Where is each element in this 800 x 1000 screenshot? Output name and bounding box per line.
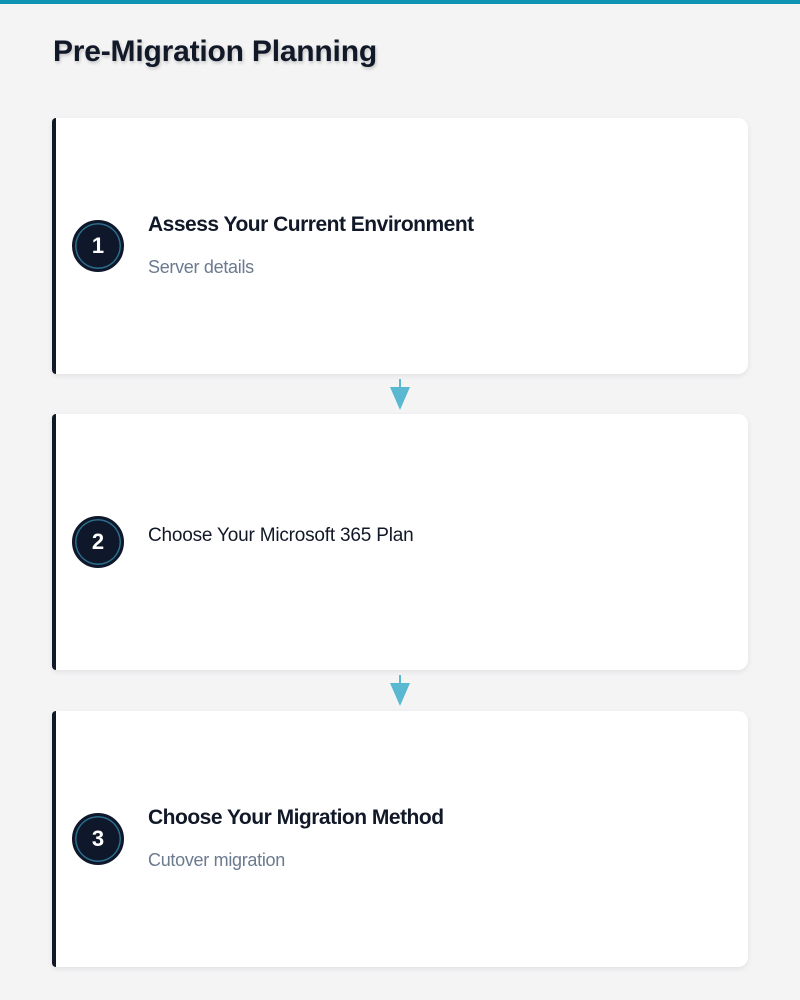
step 1 detail: Server details <box>148 257 254 277</box>
step 3 heading: Choose Your Migration Method <box>148 806 444 829</box>
step 1 number badge <box>72 220 124 272</box>
step 2 heading: Choose Your Microsoft 365 Plan <box>148 525 413 546</box>
panel: step 3 <box>52 711 748 967</box>
step 3 number badge: 3 <box>92 826 104 851</box>
title: Pre-Migration Planning <box>53 35 377 68</box>
step 1 number badge: 1 <box>92 233 104 258</box>
arrow 2 <box>390 675 410 706</box>
step 3 detail: Cutover migration <box>148 850 285 870</box>
step 3 number badge <box>72 813 124 865</box>
step 2 number badge <box>72 516 124 568</box>
panel: step 2 <box>52 414 748 670</box>
arrow 1 <box>390 379 410 410</box>
step 1 heading: Assess Your Current Environment <box>148 213 474 236</box>
step 2 number badge: 2 <box>92 529 104 554</box>
panel: step 1 <box>52 118 748 374</box>
